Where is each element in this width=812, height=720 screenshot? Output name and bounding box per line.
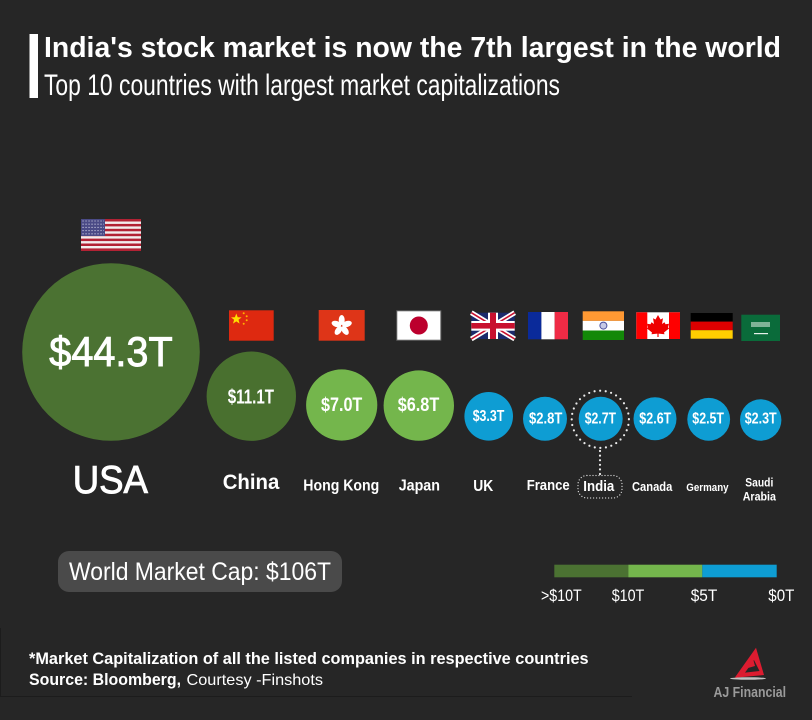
label: Germany: Germany (686, 482, 729, 494)
bubble: Germany (687, 398, 730, 441)
flag: Saudi Arabia (741, 315, 780, 341)
label: Saudi Arabia: Saudi (745, 478, 773, 490)
bubble: UK (464, 392, 513, 441)
bubble: Canada (634, 397, 676, 440)
bubble: Japan (384, 370, 454, 441)
logo: AJ Financial (714, 648, 786, 701)
subtitle: Top 10 countries with largest market capitalizations (44, 69, 560, 102)
bubble: Germany: $2.5T (692, 410, 724, 427)
flag: Hong Kong (319, 310, 365, 341)
label: UK: UK (473, 478, 494, 495)
flag: China (229, 310, 274, 341)
bubble: France (523, 397, 567, 441)
logo: AJ Financial: AJ Financial (714, 684, 786, 701)
label: France: France (527, 478, 570, 494)
label: India with dotted box (578, 476, 622, 498)
bubble: Saudi Arabia: $2.3T (745, 410, 777, 427)
bubble: India: $2.7T (585, 410, 616, 427)
bubble: China (207, 352, 296, 441)
callout: world market cap (58, 551, 342, 592)
legend: colour scale (541, 565, 794, 605)
bubble: USA (22, 263, 200, 441)
label: Japan: Japan (399, 478, 440, 495)
label: Saudi Arabia (743, 478, 777, 504)
label: India with dotted box: India (583, 478, 615, 495)
label: USA: USA (73, 459, 148, 502)
flag: UK (471, 313, 515, 339)
bubble: India (579, 397, 623, 441)
flag: India (583, 311, 624, 340)
title: India's stock market is now the 7th largest in the world (44, 32, 781, 64)
bubble: Canada: $2.6T (639, 410, 671, 427)
footnote: *Market Capitalization of all the listed companies in respective countries (29, 649, 589, 668)
bubble: Japan: $6.8T (398, 395, 440, 416)
flag: France (528, 312, 568, 339)
legend: colour scale: $10T (612, 586, 644, 605)
flag: Japan (397, 311, 441, 340)
legend: colour scale: $5T (691, 586, 717, 605)
callout: world market cap: World Market Cap: $106T (69, 558, 331, 586)
title accent bar (30, 34, 38, 98)
legend: colour scale: $0T (768, 586, 794, 605)
source line (29, 670, 323, 689)
source line: Courtesy -Finshots (186, 672, 323, 689)
label: Hong Kong: Hong Kong (303, 478, 379, 495)
flag: Germany (691, 313, 733, 339)
bubble: France: $2.8T (529, 410, 562, 427)
flag: Canada (636, 312, 680, 339)
bubble: Saudi Arabia (740, 399, 781, 441)
bubble: USA: $44.3T (49, 328, 173, 375)
label: Saudi Arabia: Arabia (743, 492, 777, 504)
bubble: UK: $3.3T (473, 408, 505, 425)
label: China: China (223, 471, 280, 494)
bubble: Hong Kong: $7.0T (321, 395, 363, 416)
bubble: Hong Kong (306, 369, 377, 441)
bubble: China: $11.1T (228, 386, 274, 408)
flag: USA (81, 219, 141, 251)
label: Canada: Canada (632, 480, 673, 494)
legend: colour scale: >$10T (541, 586, 582, 605)
source line: Source: Bloomberg, (29, 670, 181, 689)
India highlight ring and connector (572, 391, 629, 474)
